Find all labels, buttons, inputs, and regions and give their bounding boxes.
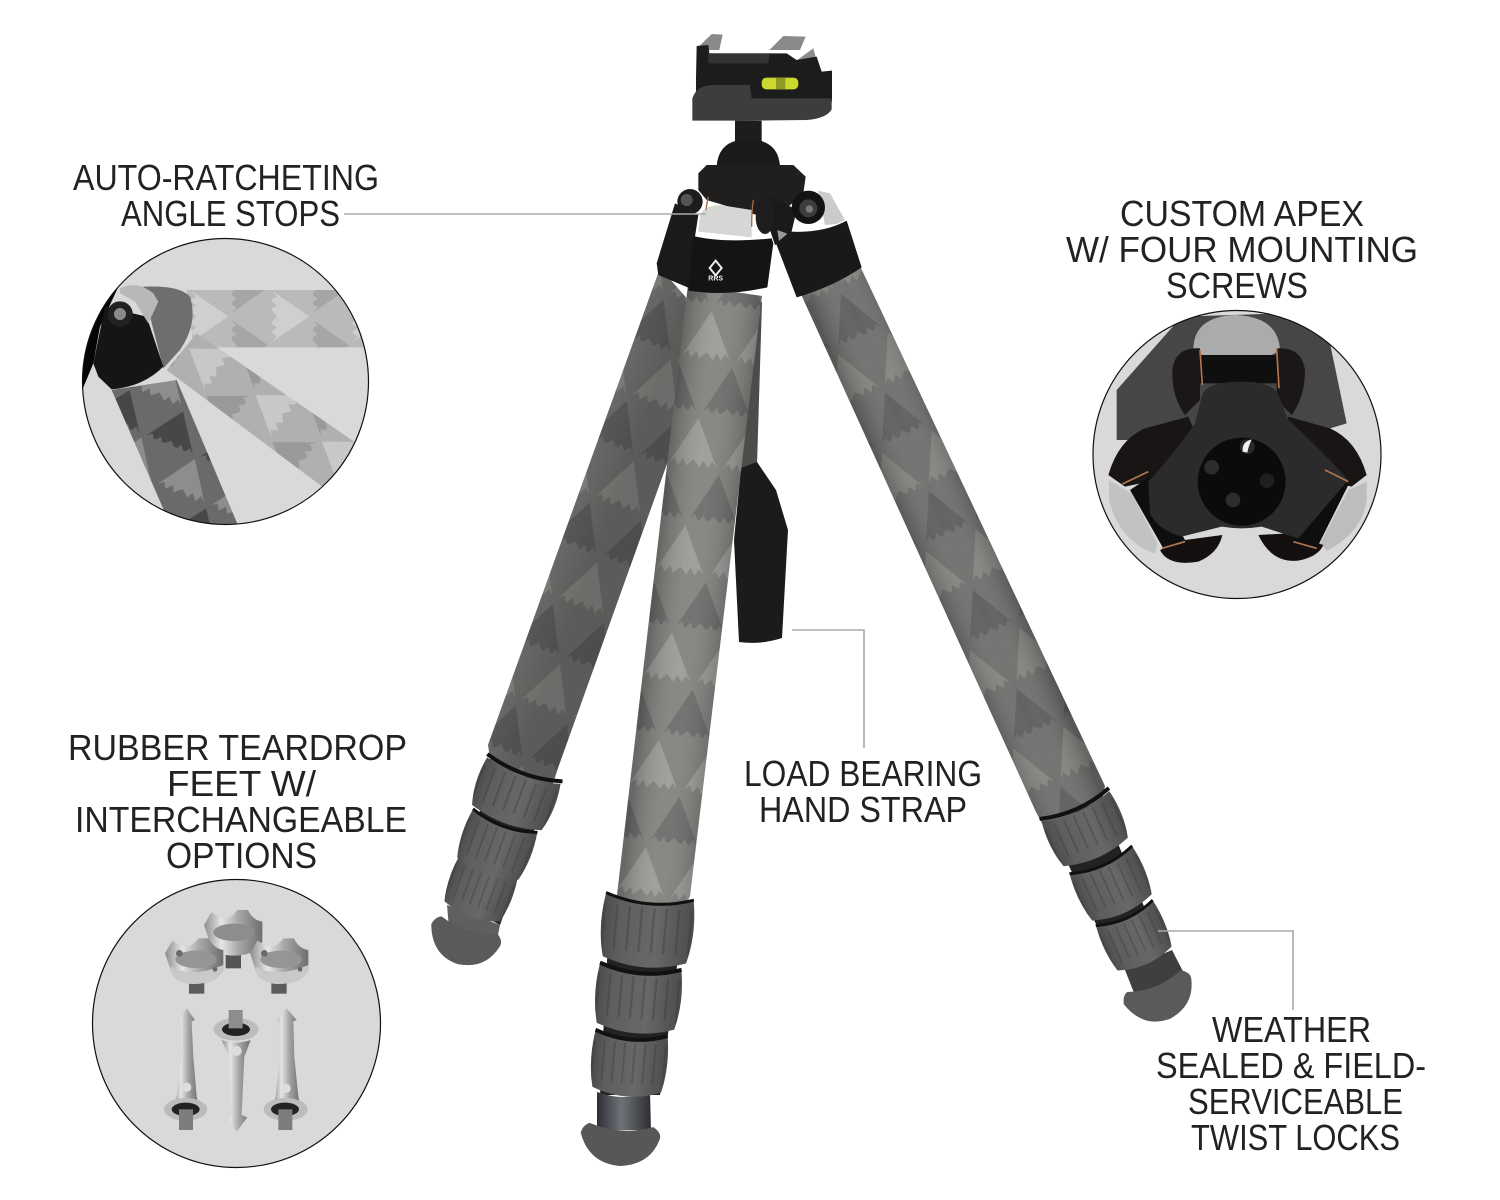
hand strap <box>734 300 788 643</box>
label: custom apex: SCREWS <box>1166 265 1308 306</box>
ghost leg horizontal <box>187 290 370 347</box>
right leg twist locks and foot <box>1039 788 1203 1034</box>
label: rubber teardrop feet: RUBBER TEARDROP <box>68 727 407 768</box>
clamp highlight <box>708 53 770 63</box>
black collar <box>93 307 163 389</box>
center crown foot <box>204 910 262 968</box>
right spike <box>264 1008 308 1130</box>
label: custom apex: W/ FOUR MOUNTING <box>1066 229 1418 270</box>
leader line: hand strap <box>792 630 864 748</box>
filler between collars <box>770 197 797 245</box>
copper accents <box>1122 348 1348 548</box>
label: weather sealed twist locks: SERVICEABLE <box>1188 1081 1403 1122</box>
RRS logo: RRS <box>708 276 723 283</box>
bubble level <box>762 78 798 89</box>
label: load bearing hand strap <box>744 753 982 830</box>
bottom lobes <box>1160 533 1323 563</box>
left collar <box>657 203 698 288</box>
apex body <box>698 165 806 220</box>
label: rubber teardrop feet: OPTIONS <box>166 835 317 876</box>
leader line: angle stops <box>344 213 706 215</box>
left leg twist locks and foot <box>423 754 564 974</box>
right knob <box>792 191 825 224</box>
label: weather sealed twist locks <box>1156 1009 1426 1158</box>
label: auto-ratcheting angle stops <box>73 157 379 234</box>
label: weather sealed twist locks: TWIST LOCKS <box>1191 1117 1400 1158</box>
label: rubber teardrop feet: INTERCHANGEABLE <box>75 799 407 840</box>
detail circle: angle stops <box>77 238 370 530</box>
left knob <box>677 189 703 214</box>
label: auto-ratcheting angle stops: ANGLE STOPS <box>121 193 340 234</box>
label: weather sealed twist locks: SEALED & FIELD- <box>1156 1045 1426 1086</box>
lower right ghost <box>1320 482 1367 551</box>
small metal tab <box>777 230 788 250</box>
black sliver <box>83 288 118 388</box>
copper edges <box>706 197 753 227</box>
tripod <box>423 34 1203 1167</box>
center leg tube <box>617 285 762 918</box>
tripod head and apex <box>657 34 862 297</box>
base dome <box>717 141 780 166</box>
detail circle: teardrop feet options <box>92 880 380 1168</box>
top lobes <box>1172 348 1305 415</box>
clamp base <box>692 85 832 121</box>
label: custom apex: CUSTOM APEX <box>1120 193 1364 234</box>
label: load bearing hand strap: HAND STRAP <box>759 789 967 830</box>
ghost leg diagonal <box>167 333 357 490</box>
center spike <box>213 1010 259 1132</box>
label: rubber teardrop feet <box>68 727 407 876</box>
apex tri body <box>1148 382 1348 538</box>
detail circle: custom apex <box>1093 310 1381 598</box>
leader line: twist locks <box>1158 931 1293 1010</box>
mounting screws <box>1204 439 1274 507</box>
right collar <box>776 221 862 297</box>
center leg twist locks and foot <box>580 892 696 1167</box>
ghost collar <box>143 286 193 368</box>
label: weather sealed twist locks: WEATHER <box>1212 1009 1371 1050</box>
label: custom apex <box>1066 193 1418 306</box>
top band <box>1200 355 1278 383</box>
left leg tube <box>488 268 715 808</box>
center collar <box>688 236 773 293</box>
leg tubes behind <box>1117 313 1347 440</box>
quick release clamp <box>696 45 832 102</box>
lower left ghost <box>1109 480 1158 554</box>
clamp ears <box>699 34 817 63</box>
ball stem <box>735 121 762 143</box>
label: load bearing hand strap: LOAD BEARING <box>744 753 982 794</box>
left crown foot <box>165 938 223 994</box>
RRS logo <box>708 261 723 283</box>
label: auto-ratcheting angle stops: AUTO-RATCHETING <box>73 157 379 198</box>
right leg tube <box>800 266 1105 838</box>
metal top <box>120 285 158 323</box>
left spike <box>164 1008 207 1130</box>
side lobes <box>1108 417 1367 487</box>
knob <box>107 301 133 327</box>
lower bands <box>1130 473 1348 548</box>
centre socket <box>1198 438 1286 526</box>
right wedge <box>818 191 845 225</box>
solid leg <box>112 380 240 530</box>
middle knob <box>756 201 774 234</box>
label: rubber teardrop feet: FEET W/ <box>167 763 316 804</box>
white wedge <box>698 205 752 237</box>
right crown foot <box>250 938 308 994</box>
top ghost dome <box>1193 315 1280 355</box>
